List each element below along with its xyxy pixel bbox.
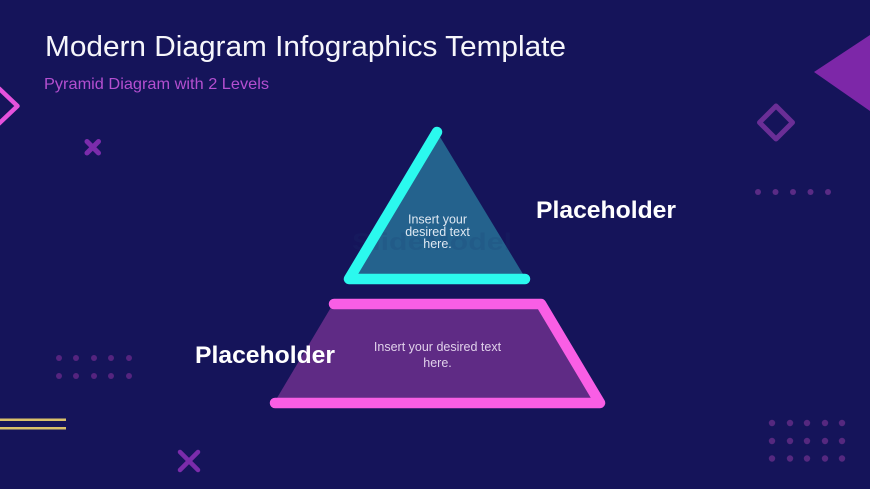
label: placeholder top: Placeholder <box>536 197 676 224</box>
watermark: SlideModel <box>352 229 512 256</box>
triangle text: desired text <box>405 225 470 239</box>
triangle text: Insert your <box>408 212 467 226</box>
dots: bottom left grid <box>56 355 132 379</box>
dots: bottom right grid <box>769 420 845 462</box>
icon: pink diamond outline left <box>0 88 18 124</box>
icon: purple triangle top right <box>814 35 870 111</box>
icon: purple diamond outline right <box>760 106 792 139</box>
triangle neon outline <box>349 132 525 279</box>
label: placeholder bottom: Placeholder <box>195 342 335 369</box>
trapezoid text: Insert your desired text <box>374 340 502 354</box>
dots: top right row <box>755 189 831 195</box>
yellow double lines <box>0 418 66 430</box>
trapezoid neon outline <box>275 304 600 403</box>
icon: purple x bottom left <box>180 452 198 470</box>
triangle text: here. <box>423 237 452 251</box>
title: Modern Diagram Infographics Template <box>45 31 566 63</box>
icon: purple x top left <box>87 142 98 153</box>
pyramid bottom level <box>274 304 601 403</box>
triangle fill <box>348 132 526 279</box>
pyramid top level <box>348 132 526 279</box>
trapezoid fill <box>274 304 601 403</box>
trapezoid text: here. <box>423 356 452 370</box>
subtitle: Pyramid Diagram with 2 Levels <box>44 76 269 93</box>
